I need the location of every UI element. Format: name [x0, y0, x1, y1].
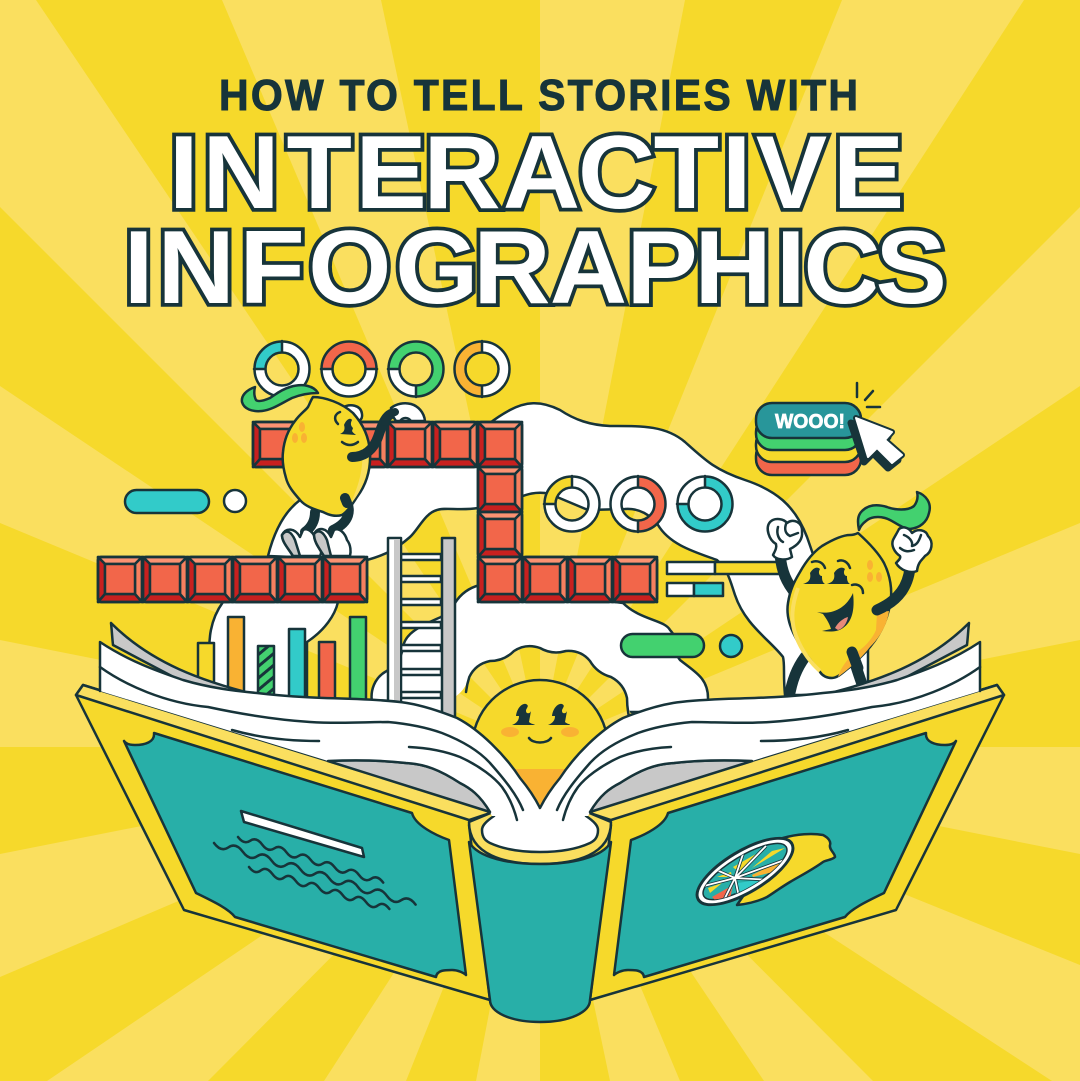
- right cover pale band: [587, 685, 1004, 820]
- left grey wedge: [328, 760, 490, 812]
- right lemon highlight: [792, 588, 820, 671]
- character: right lemon: [768, 492, 932, 698]
- left cover title bar: [241, 811, 364, 857]
- left lemon body: [283, 397, 370, 516]
- left cover teal panel: [124, 733, 466, 977]
- left lemon arm: [352, 414, 391, 457]
- sun wavy aura: [456, 644, 631, 715]
- left lemon back hand: [342, 405, 362, 423]
- donut: orange half: [454, 341, 510, 397]
- bricks: top row and column: [253, 422, 522, 602]
- white hill: behind bar chart: [209, 602, 338, 700]
- right lemon right leg stub: [852, 652, 858, 668]
- left lemon leaf: [242, 385, 318, 411]
- right back sheet: [810, 623, 969, 698]
- right page fill: [540, 642, 980, 816]
- icon: cursor with click sparks: [851, 383, 902, 468]
- progress bars: [667, 562, 780, 596]
- right lemon right hand: [892, 527, 932, 572]
- donut row: middle: [544, 476, 732, 532]
- right lemon legs: [789, 652, 864, 698]
- right cover teal panel: [614, 733, 956, 977]
- title: how to tell stories with: HOW TO TELL STORIES WITH: [219, 71, 858, 119]
- right lemon left hand: [768, 519, 802, 559]
- spine collar: [469, 812, 611, 864]
- button: wooo stack: [756, 403, 861, 475]
- character: left lemon: [242, 385, 425, 556]
- sun: [456, 644, 631, 806]
- book: spine: [469, 812, 611, 1022]
- donut: yellow quarter: [544, 476, 600, 532]
- button: wooo stack: WOOO!: [775, 411, 845, 433]
- page block end: [482, 812, 598, 852]
- left lemon face: [335, 412, 358, 445]
- right lemon body: [787, 533, 891, 678]
- pill: green with teal dot: [621, 634, 742, 657]
- left cover pale band: [76, 685, 493, 820]
- book: left cover: [76, 685, 493, 1000]
- white hill: upper mountain: [268, 403, 868, 695]
- book: right cover: [587, 685, 1004, 1000]
- right lemon left arm: [780, 555, 796, 594]
- title: infographics: INFOGRAPHICS: [124, 209, 947, 326]
- bricks: left row: [98, 557, 367, 602]
- bar chart: [198, 617, 366, 713]
- right lemon right arm: [877, 568, 910, 610]
- donut: teal quarter: [254, 341, 310, 396]
- left lemon legs: [305, 498, 349, 532]
- ladder: [388, 538, 455, 728]
- left page fill: [100, 642, 540, 816]
- title: interactive: INTERACTIVE: [169, 114, 904, 231]
- left page outlines: [100, 642, 540, 820]
- left back sheet: [111, 623, 270, 698]
- spine teal face: [469, 842, 611, 1022]
- donut: green three quarters: [388, 342, 444, 397]
- right lemon freckles: [867, 560, 882, 582]
- donut: red half: [321, 342, 377, 396]
- bricks: right row: [523, 557, 657, 602]
- book: right pages: [540, 623, 980, 820]
- pill: teal with white dot: [125, 490, 246, 513]
- left lemon near leg cap: [345, 498, 347, 503]
- left lemon freckles: [292, 422, 307, 443]
- right lemon orange shade: [838, 611, 889, 677]
- white hill: lower right: [372, 585, 708, 712]
- right lemon face: [803, 560, 863, 632]
- icon: lemon slice on cover: [696, 832, 836, 906]
- left lemon highlight: [350, 448, 368, 505]
- left cover wavy text lines: [214, 837, 416, 909]
- donut: red half right: [610, 476, 666, 532]
- right lemon leaf: [858, 492, 930, 530]
- donut row: top: [254, 341, 510, 397]
- donut: teal three quarters: [677, 476, 732, 532]
- sun face: [472, 680, 608, 817]
- left lemon feet: [282, 529, 351, 556]
- right grey wedge: [590, 760, 752, 812]
- right page outlines: [540, 642, 980, 820]
- left lemon front hand: [385, 403, 425, 422]
- book: left pages: [100, 623, 540, 820]
